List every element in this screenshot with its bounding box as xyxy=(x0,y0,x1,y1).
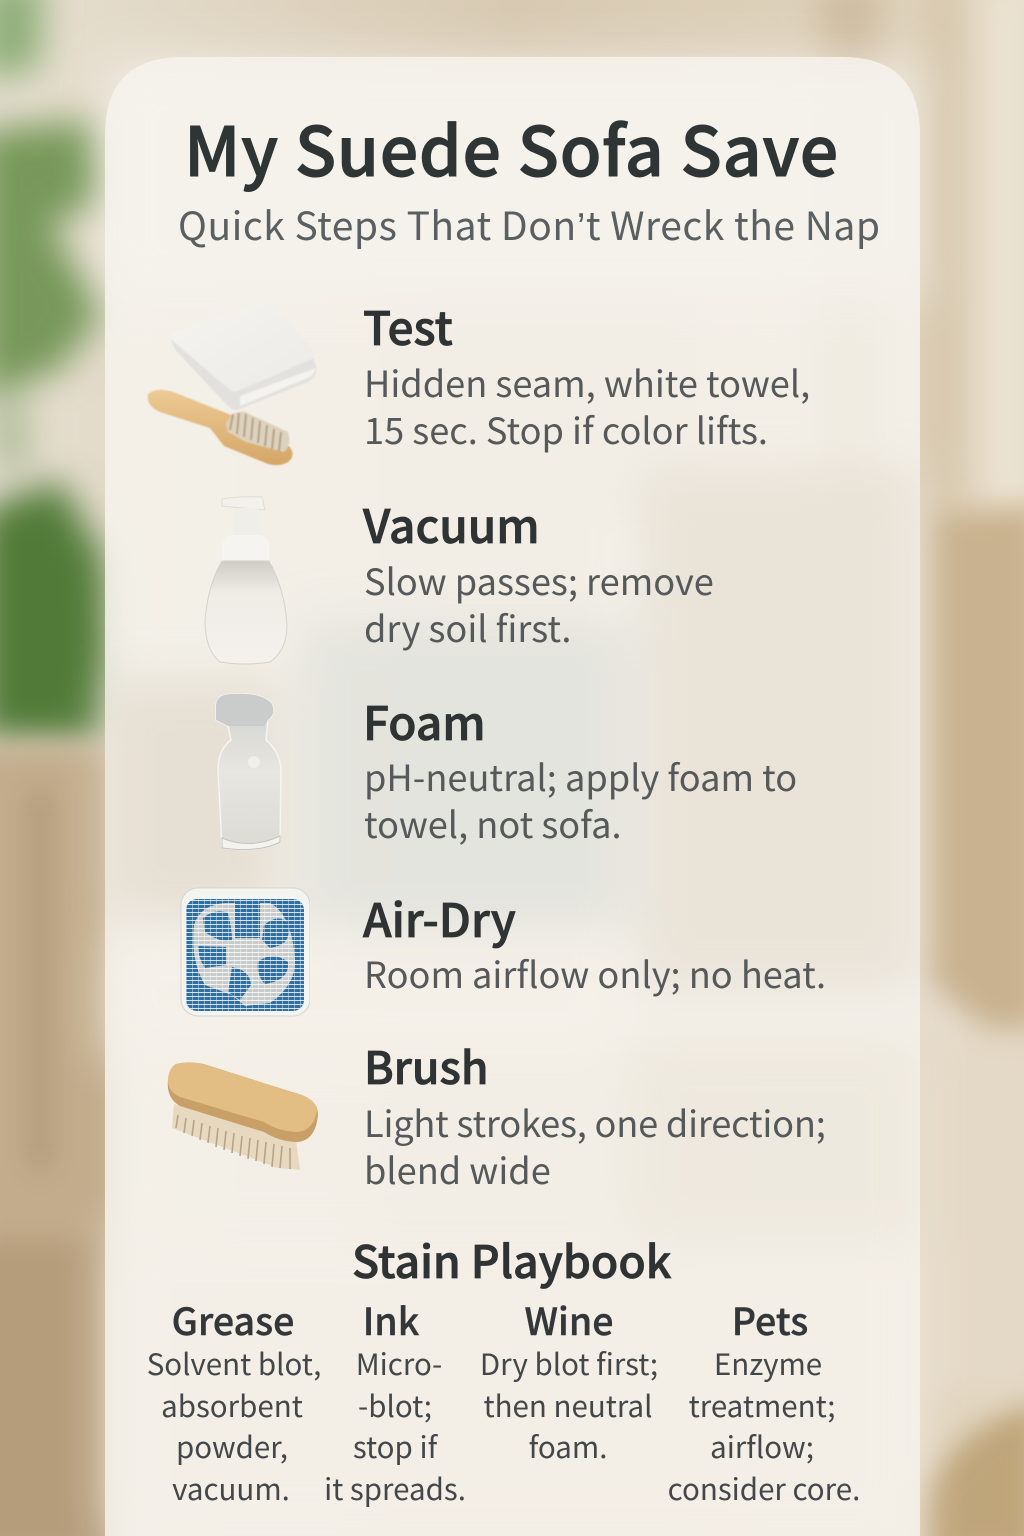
subtitle: Quick Steps That Don’t Wreck the Nap xyxy=(178,196,881,252)
icon: suede brush xyxy=(168,1062,318,1170)
step: Foam: towel, not sofa. xyxy=(364,797,622,849)
column: Pets: treatment; xyxy=(689,1384,835,1426)
step heading: Test xyxy=(363,293,453,359)
column: Ink: -blot; xyxy=(358,1384,432,1426)
column heading: Wine xyxy=(525,1291,613,1346)
column: Pets: airflow; xyxy=(710,1425,814,1467)
column: Grease: absorbent xyxy=(161,1384,303,1426)
column heading: Grease xyxy=(172,1291,294,1346)
step text: pH-neutral; apply foam to xyxy=(364,750,797,802)
column: Grease: powder, xyxy=(176,1425,288,1467)
step text: Room airflow only; no heat. xyxy=(364,947,826,999)
column: Wine: then neutral xyxy=(484,1384,652,1426)
step text: Hidden seam, white towel, xyxy=(364,356,810,408)
column text: Dry blot first; xyxy=(480,1342,658,1384)
column: Wine: foam. xyxy=(529,1425,607,1467)
translucent panel xyxy=(105,57,920,1536)
step heading: Air-Dry xyxy=(363,885,516,951)
column: Grease: vacuum. xyxy=(172,1467,290,1509)
icon: foam pump bottle xyxy=(204,496,288,664)
column text: Enzyme xyxy=(714,1342,822,1384)
column: Ink: it spreads. xyxy=(324,1467,466,1509)
column: Pets: consider core. xyxy=(668,1467,860,1509)
column: Ink: stop if xyxy=(353,1425,437,1467)
heading: Stain Playbook: Stain Playbook xyxy=(352,1226,671,1291)
icon: towel and brush xyxy=(147,340,316,466)
step: Brush: blend wide xyxy=(364,1143,551,1195)
step text: Light strokes, one direction; xyxy=(364,1096,826,1148)
column text: Solvent blot, xyxy=(147,1342,321,1384)
step text: Slow passes; remove xyxy=(364,554,714,606)
title: My Suede Sofa Save xyxy=(184,97,839,196)
step: Test: 15 sec. Stop if color lifts. xyxy=(364,403,768,455)
column text: Micro- xyxy=(356,1342,442,1384)
step heading: Foam xyxy=(363,688,486,754)
column heading: Pets xyxy=(732,1291,808,1346)
icon: box fan xyxy=(180,888,310,1016)
step heading: Vacuum xyxy=(363,491,540,557)
step: Vacuum: dry soil first. xyxy=(364,601,571,653)
step heading: Brush xyxy=(364,1032,488,1097)
icon: clear spray bottle xyxy=(215,693,282,850)
column heading: Ink xyxy=(363,1291,419,1346)
